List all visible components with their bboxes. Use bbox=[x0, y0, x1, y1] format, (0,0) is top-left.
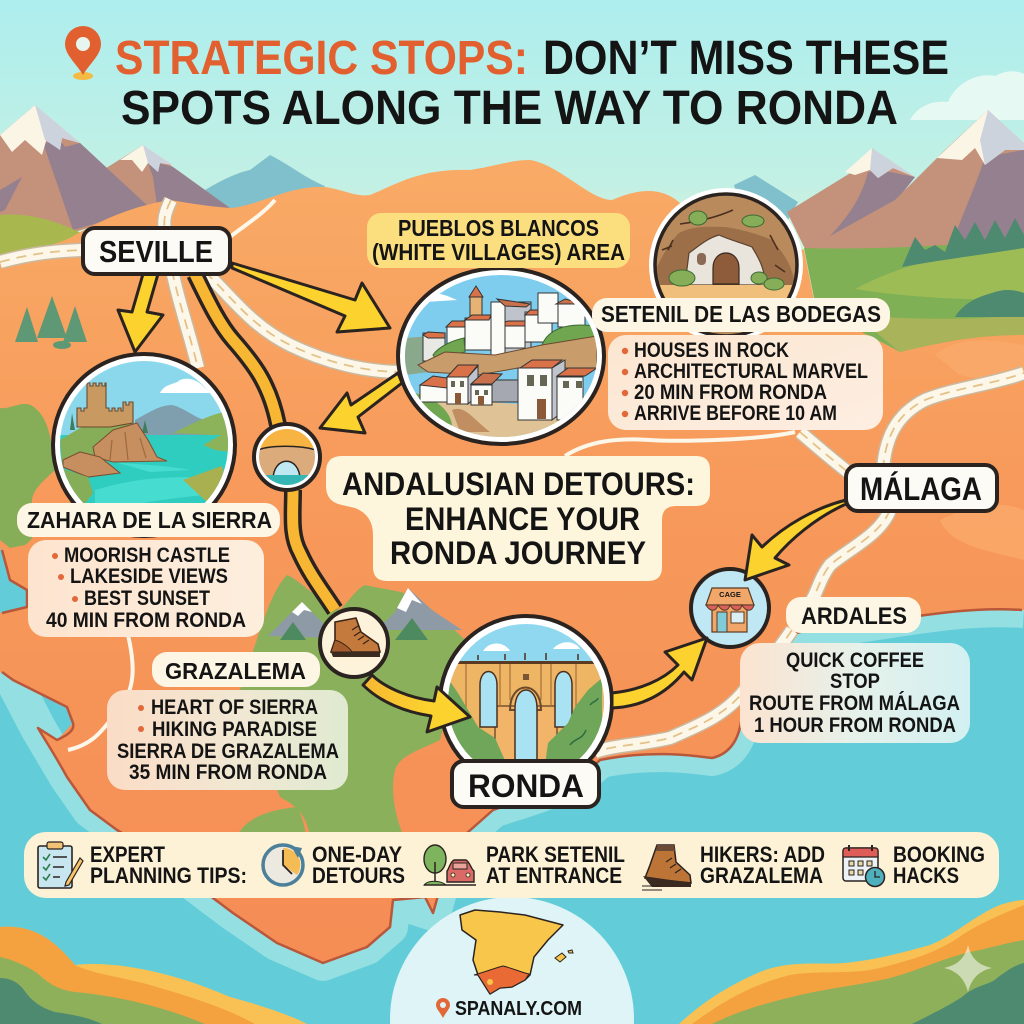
panel: expert planning tips bbox=[24, 832, 999, 898]
panel: Grazalema facts: HEART OF SIERRA bbox=[151, 696, 318, 719]
panel: Grazalema facts: 35 MIN FROM RONDA bbox=[129, 761, 327, 784]
tip: park Setenil bbox=[486, 842, 625, 888]
land: lighter orange patches bbox=[935, 341, 1024, 560]
city label: Seville: SEVILLE bbox=[99, 234, 213, 269]
label: Ardales: ARDALES bbox=[801, 603, 907, 630]
background: sky bbox=[0, 0, 1024, 330]
rock ledge bbox=[418, 336, 597, 375]
tip: expert planning bbox=[90, 842, 247, 888]
tip: expert planning: EXPERT bbox=[90, 842, 165, 867]
land: Andalusia bbox=[0, 160, 1024, 963]
roads bbox=[0, 200, 1024, 752]
centre title panel: ANDALUSIAN DETOURS: bbox=[342, 466, 695, 502]
tip: booking hacks: HACKS bbox=[893, 863, 959, 888]
tip: booking hacks bbox=[893, 842, 985, 888]
mountains: right range bbox=[734, 110, 1024, 270]
panel: Zahara facts: LAKESIDE VIEWS bbox=[70, 565, 228, 588]
panel: Setenil facts: ARRIVE BEFORE 10 AM bbox=[634, 402, 837, 425]
cafe sign text: CAGE bbox=[719, 590, 741, 599]
map: Balearic islands bbox=[555, 950, 573, 962]
panel: Zahara facts: MOORISH CASTLE bbox=[64, 544, 230, 567]
panel: Zahara facts: BEST SUNSET bbox=[84, 587, 210, 610]
lower houses bbox=[420, 360, 597, 420]
tip: hikers: HIKERS: ADD bbox=[700, 842, 825, 867]
panel: Zahara facts: 40 MIN FROM RONDA bbox=[46, 609, 246, 632]
icon: clipboard bbox=[38, 842, 83, 888]
mountains near Grazalema bbox=[268, 588, 462, 640]
panel: Grazalema facts: HIKING PARADISE bbox=[152, 718, 317, 741]
upper houses bbox=[423, 286, 585, 361]
city label: Seville bbox=[83, 228, 230, 274]
title: STRATEGIC STOPS: bbox=[115, 32, 528, 85]
land: coastline stroke bbox=[2, 550, 1022, 963]
tip: one-day detours bbox=[312, 842, 405, 888]
icon: hiking boot on route bbox=[320, 609, 388, 677]
route: main yellow road Seville to Ronda bbox=[195, 274, 335, 610]
tip: one-day detours: ONE-DAY bbox=[312, 842, 402, 867]
icon: hiking boot bbox=[642, 845, 691, 890]
panel: Ardales facts: 1 HOUR FROM RONDA bbox=[754, 714, 956, 737]
icon: calendar bbox=[843, 845, 884, 886]
land: central green Grazalema area bbox=[240, 575, 465, 835]
arrow: Seville to Pueblos Blancos bbox=[232, 263, 390, 332]
tip: booking hacks: BOOKING bbox=[893, 842, 985, 867]
tip: park Setenil: AT ENTRANCE bbox=[486, 863, 622, 888]
panel: Setenil facts: HOUSES IN ROCK bbox=[634, 339, 789, 362]
label: Grazalema: GRAZALEMA bbox=[165, 658, 306, 684]
label: Pueblos Blancos bbox=[367, 213, 630, 268]
scene: Setenil cave house bbox=[649, 188, 803, 342]
tip: one-day detours: DETOURS bbox=[312, 863, 405, 888]
city label: Ronda: RONDA bbox=[468, 768, 584, 804]
arrow: Malaga to cafe bbox=[745, 500, 846, 580]
panel: Grazalema facts: SIERRA DE GRAZALEMA bbox=[117, 740, 339, 763]
panel: Zahara facts bbox=[28, 540, 264, 637]
map: Ronda dot bbox=[487, 979, 493, 985]
icon: pine trees bbox=[15, 296, 87, 349]
ground bbox=[416, 393, 580, 437]
centre title panel: ENHANCE YOUR bbox=[405, 501, 640, 537]
arrow: Pueblos Blancos to bridge bbox=[320, 373, 402, 433]
panel: Ardales facts: QUICK COFFEE bbox=[786, 649, 924, 672]
icon: cafe shop bbox=[691, 569, 769, 647]
land: eastern green hills bbox=[804, 218, 1024, 352]
bottom scenery: right hills bbox=[679, 900, 1024, 1024]
icon: tree and car bbox=[424, 845, 476, 885]
tip: park Setenil: PARK SETENIL bbox=[486, 842, 625, 867]
icon: title map pin bbox=[65, 26, 101, 80]
panel: Setenil facts: ARCHITECTURAL MARVEL bbox=[634, 360, 868, 383]
decorative sparkle bbox=[944, 945, 992, 992]
panel: Ardales facts: ROUTE FROM MÁLAGA bbox=[749, 692, 960, 715]
mountains: left range bbox=[0, 105, 325, 262]
tip: hikers bbox=[700, 842, 825, 888]
scene: Ronda bridge bbox=[439, 614, 614, 760]
land: small green hump above tips bar bbox=[238, 807, 306, 835]
city label: Malaga bbox=[846, 465, 997, 511]
centre title panel: RONDA JOURNEY bbox=[390, 535, 646, 571]
small icon: bridge on the route bbox=[254, 424, 320, 490]
arrow: route into Ronda bbox=[363, 675, 470, 732]
land: shallow water along the coast bbox=[0, 609, 1024, 963]
land: western green area bbox=[0, 404, 55, 548]
city label: Ronda bbox=[452, 761, 599, 807]
title bbox=[115, 32, 949, 135]
scene: Pueblos Blancos village bbox=[398, 268, 605, 444]
panel: Ardales facts bbox=[740, 643, 970, 743]
cloud bbox=[910, 71, 1024, 120]
tip: hikers: GRAZALEMA bbox=[700, 863, 823, 888]
panel: Setenil facts: 20 MIN FROM RONDA bbox=[634, 381, 827, 404]
panel: Setenil facts bbox=[608, 335, 883, 430]
label: Pueblos Blancos: PUEBLOS BLANCOS bbox=[398, 215, 599, 241]
website text: SPANALY.COM bbox=[455, 998, 582, 1020]
title: SPOTS ALONG THE WAY TO RONDA bbox=[121, 82, 898, 135]
locator circle with Spain map bbox=[390, 897, 634, 1024]
tip: expert planning: PLANNING TIPS: bbox=[90, 863, 247, 888]
icon: website pin bbox=[436, 998, 450, 1018]
map: Andalusia highlight bbox=[474, 966, 529, 994]
map: Spain bbox=[460, 910, 563, 994]
label: Ardales bbox=[786, 597, 921, 633]
background: sea bbox=[0, 300, 1024, 1024]
arrow: Ronda to cafe bbox=[612, 638, 707, 708]
label: Setenil de las Bodegas: SETENIL DE LAS BODEGAS bbox=[601, 301, 881, 327]
arrow: Seville to Zahara bbox=[118, 274, 163, 352]
icon: clock bbox=[263, 845, 303, 885]
label: Grazalema bbox=[152, 652, 320, 687]
label: Zahara de la Sierra: ZAHARA DE LA SIERRA bbox=[27, 507, 272, 533]
panel: Ardales facts: STOP bbox=[830, 670, 880, 693]
centre title panel bbox=[326, 456, 710, 581]
title: DON’T MISS THESE bbox=[543, 32, 949, 85]
city label: Malaga: MÁLAGA bbox=[860, 471, 982, 507]
scene: Zahara de la Sierra bbox=[53, 354, 235, 536]
green terraces bbox=[433, 325, 598, 358]
bottom scenery: left hills bbox=[0, 927, 307, 1024]
label: Pueblos Blancos: (WHITE VILLAGES) AREA bbox=[372, 239, 625, 265]
panel: Grazalema facts bbox=[107, 690, 348, 790]
